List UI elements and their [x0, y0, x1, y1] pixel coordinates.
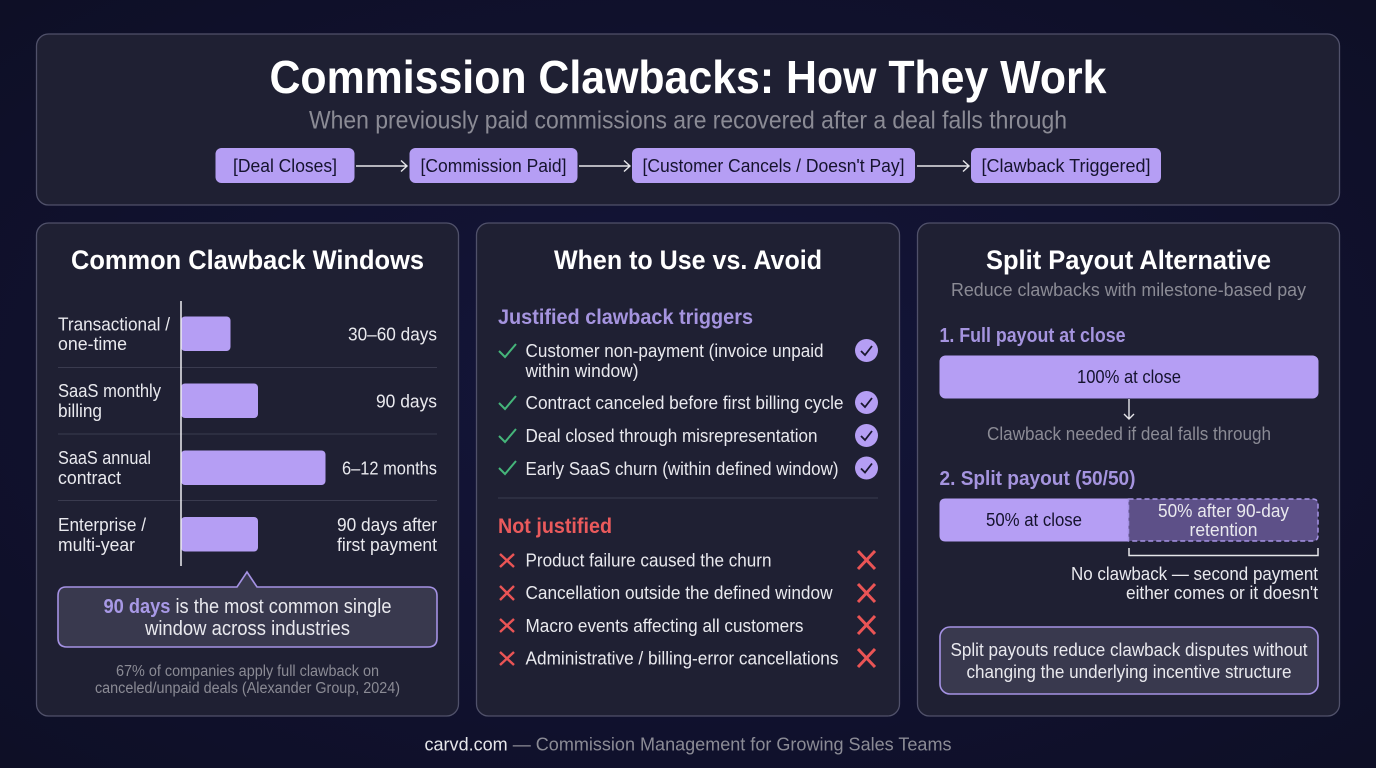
row: transactional: Transactional / — [58, 314, 170, 334]
justified list — [499, 339, 878, 480]
section: full payout: 1. Full payout at close — [940, 325, 1126, 347]
section: split payout: 2. Split payout (50/50) — [940, 468, 1136, 490]
panel: header — [36, 34, 1340, 205]
row: saas annual: contract — [58, 468, 121, 488]
callout: changing the underlying incentive structure — [966, 662, 1292, 682]
heading: When to Use vs. Avoid — [554, 245, 822, 275]
callout: 90 days is the most common single — [104, 596, 392, 618]
arrow — [1124, 399, 1134, 419]
item — [500, 550, 875, 570]
section: full payout — [940, 325, 1318, 444]
flow step: clawback triggered — [971, 148, 1161, 183]
bar: split — [940, 498, 1318, 542]
callout: Split payouts reduce clawback disputes without — [950, 640, 1308, 660]
callout: window across industries — [144, 618, 350, 640]
axis — [180, 301, 182, 566]
row: transactional: 30–60 days — [348, 324, 437, 344]
section heading: justified: Justified clawback triggers — [498, 306, 753, 329]
flow step: customer cancels: [Customer Cancels / Doesn't Pay] — [642, 156, 904, 176]
flow diagram — [216, 148, 1161, 183]
footer: carvd.com — Commission Management for Growing Sales Teams — [424, 734, 952, 754]
section: split payout: No clawback — second payment — [1071, 564, 1318, 584]
subtitle: When previously paid commissions are recovered after a deal falls through — [309, 106, 1067, 134]
row: saas annual — [58, 448, 437, 488]
bracket — [1129, 548, 1318, 556]
row: enterprise — [58, 515, 437, 555]
callout — [58, 572, 437, 647]
source note: 67% of companies apply full clawback on — [116, 663, 379, 680]
arrow — [579, 160, 630, 172]
item: Macro events affecting all customers — [526, 616, 804, 636]
section heading: not justified: Not justified — [498, 515, 612, 538]
source note: canceled/unpaid deals (Alexander Group, 2024) — [95, 680, 400, 697]
bar chart — [58, 301, 437, 566]
item: Contract canceled before first billing cycle — [526, 393, 844, 413]
flow step: commission paid: [Commission Paid] — [420, 156, 566, 176]
heading: Split Payout Alternative — [986, 245, 1271, 275]
row: saas monthly: 90 days — [376, 392, 437, 412]
row: enterprise: first payment — [337, 535, 437, 555]
bar: 100% at close: 100% at close — [1077, 367, 1181, 387]
row: transactional — [58, 314, 437, 354]
flow step: clawback triggered: [Clawback Triggered] — [982, 156, 1150, 176]
panel: common clawback windows — [36, 223, 458, 716]
item: Customer non-payment (invoice unpaid — [526, 341, 824, 361]
row: transactional: one-time — [58, 334, 127, 354]
bar: split: 50% after 90-day — [1158, 501, 1289, 521]
not justified list — [500, 550, 875, 668]
item: Administrative / billing-error cancellations — [526, 648, 838, 668]
source note — [95, 663, 400, 697]
item: Product failure caused the churn — [526, 550, 772, 570]
title: Commission Clawbacks: How They Work — [270, 51, 1107, 103]
row: saas annual: SaaS annual — [58, 448, 151, 468]
heading: Common Clawback Windows — [71, 245, 424, 275]
panel: split payout alternative — [918, 223, 1340, 716]
section: full payout: Clawback needed if deal falls through — [987, 424, 1271, 444]
arrow — [356, 160, 407, 172]
item — [499, 339, 878, 381]
flow step: deal closes — [216, 148, 354, 183]
row: saas monthly: billing — [58, 401, 102, 421]
row: enterprise: multi-year — [58, 535, 135, 555]
bar: split: 50% at close — [986, 510, 1082, 530]
flow step: customer cancels — [632, 148, 915, 183]
row: enterprise: 90 days after — [337, 515, 437, 535]
row: saas monthly: SaaS monthly — [58, 381, 161, 401]
flow step: commission paid — [410, 148, 578, 183]
item: Cancellation outside the defined window — [526, 583, 833, 603]
flow step: deal closes: [Deal Closes] — [233, 156, 337, 176]
row: saas annual: 6–12 months — [342, 458, 437, 478]
row: enterprise: Enterprise / — [58, 515, 146, 535]
item: within window) — [525, 361, 638, 381]
panel: when to use vs avoid — [476, 223, 900, 716]
callout — [940, 627, 1318, 694]
bar: split: retention — [1190, 520, 1258, 540]
subheading: Reduce clawbacks with milestone-based pay — [951, 280, 1306, 300]
bar: 100% at close — [940, 356, 1318, 398]
item: Deal closed through misrepresentation — [526, 426, 818, 446]
item: Early SaaS churn (within defined window) — [526, 459, 838, 479]
section: split payout — [940, 468, 1318, 603]
section: split payout: either comes or it doesn't — [1126, 583, 1318, 603]
arrow — [917, 160, 969, 172]
row: saas monthly — [58, 381, 437, 421]
